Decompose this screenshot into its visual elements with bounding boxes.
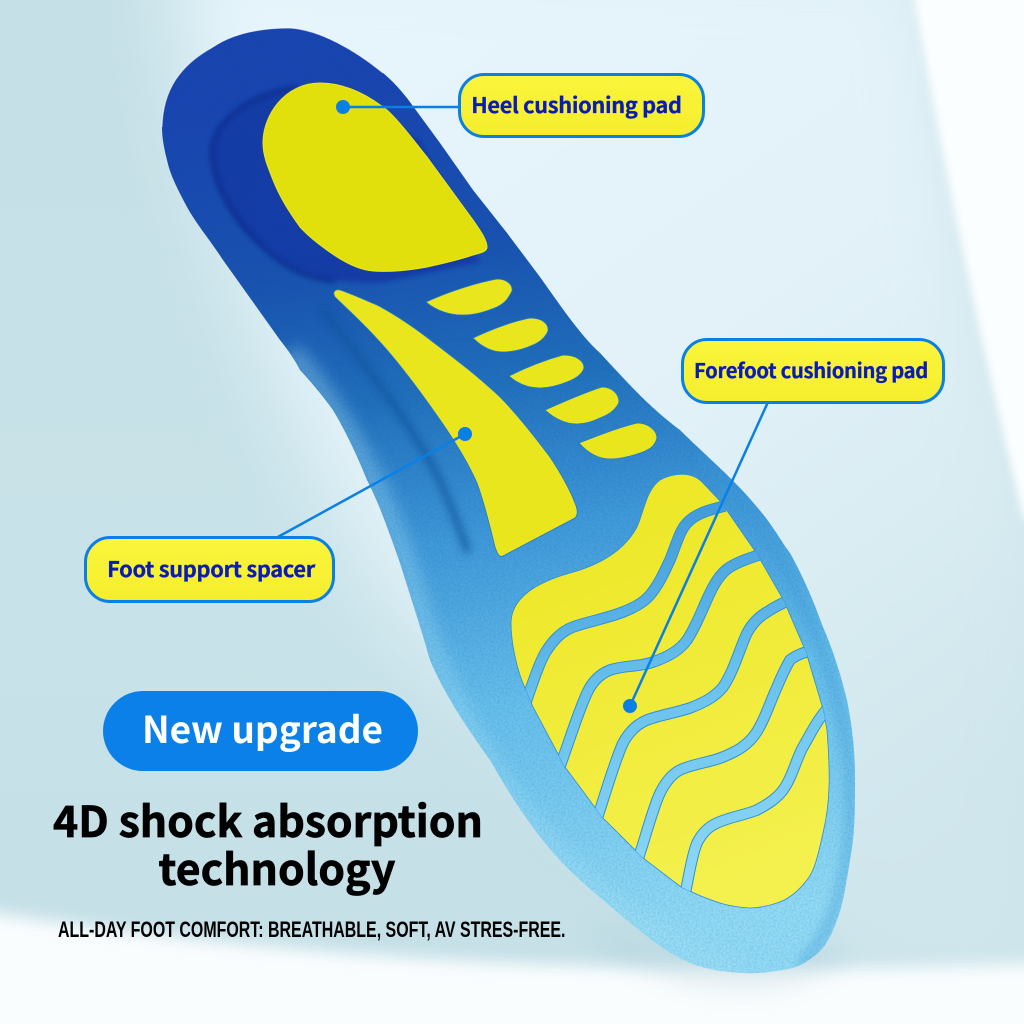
callout: forefoot cushioning pad: Forefoot cushioning pad (694, 355, 928, 384)
callout: foot support spacer (84, 536, 335, 603)
callout: foot support spacer: Foot support spacer (107, 552, 315, 584)
tagline: ALL-DAY FOOT COMFORT: BREATHABLE, SOFT, AV STRES-FREE. (58, 917, 565, 942)
insole base (162, 28, 855, 995)
leader: heel (336, 100, 460, 114)
insole (162, 28, 855, 995)
forefoot pads (511, 474, 829, 908)
heading: 4D shock absorption (53, 788, 483, 850)
small pads row (426, 279, 657, 459)
leader: spacer (276, 427, 472, 538)
badge: new upgrade (103, 691, 418, 771)
callout: forefoot cushioning pad (681, 338, 945, 404)
arch support pad (334, 290, 577, 556)
leader: forefoot (623, 402, 768, 713)
callout: heel cushioning pad (458, 73, 705, 138)
heading (53, 788, 483, 898)
heel pad (263, 83, 487, 271)
badge: new upgrade: New upgrade (142, 700, 383, 754)
heading: technology (159, 836, 395, 898)
callout: heel cushioning pad: Heel cushioning pad (471, 88, 682, 120)
